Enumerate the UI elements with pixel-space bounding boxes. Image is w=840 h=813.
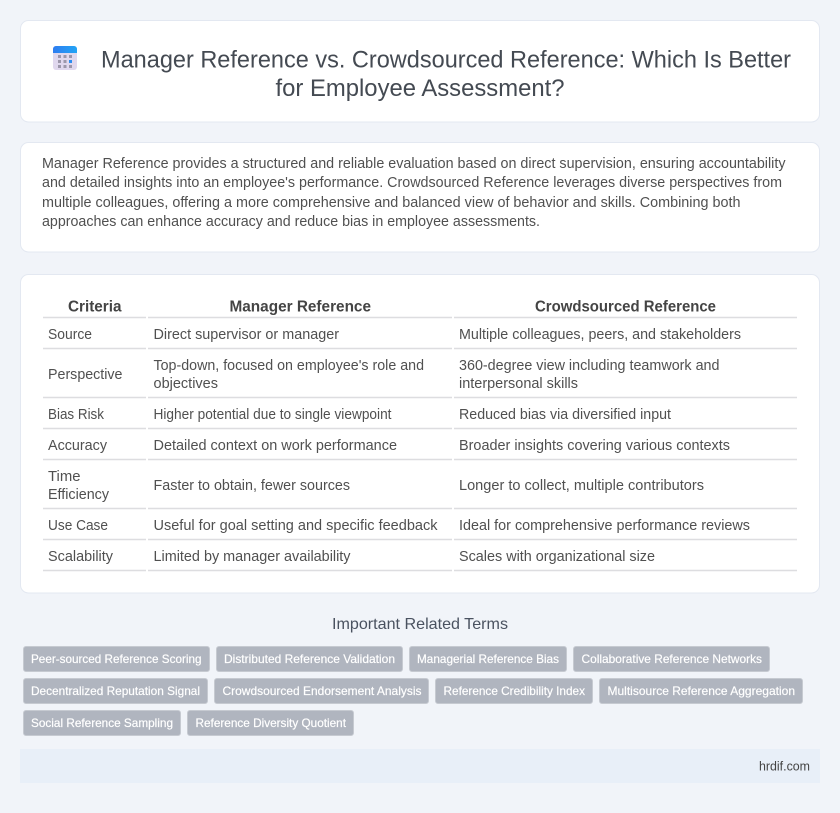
row: Scalability [48,549,655,565]
row: Accuracy: Detailed context on work performance [154,438,397,454]
table header row: Crowdsourced Reference [535,298,716,316]
row: Accuracy: Broader insights covering various contexts [459,438,730,454]
tag [436,678,592,704]
row: Accuracy [48,438,730,454]
tag: Decentralized Reputation Signal [31,684,200,698]
row: Time Efficiency: Longer to collect, multiple contributors [459,478,704,494]
row: Source: Source [48,327,92,343]
text block: introduction: approaches can enhance accuracy and reduce bias in employee assessments. [42,214,540,230]
tag [24,710,180,736]
text block: introduction [42,156,786,230]
row: Source: Multiple colleagues, peers, and stakeholders [459,327,741,343]
row: Perspective: interpersonal skills [459,376,578,392]
tag [24,678,208,704]
footer [20,749,820,783]
row: Perspective: objectives [154,376,218,392]
row: Use Case [48,518,750,534]
heading: title: for Employee Assessment? [276,75,564,102]
row: Scalability: Scalability [48,549,114,565]
tag [574,646,770,672]
heading: Important Related Terms: Important Related Terms [332,616,508,633]
tag [214,678,428,704]
row: Perspective: Perspective [48,367,122,383]
panel: introduction [20,142,820,252]
row: Perspective [48,358,720,392]
text block: introduction: Manager Reference provides a structured and reliable evaluation based on direct supervision, ensuring accountability [42,156,786,172]
row: Time Efficiency: Time [48,469,80,485]
tag: Peer-sourced Reference Scoring [31,652,202,666]
row: Bias Risk: Reduced bias via diversified input [459,407,671,423]
footer text: site name: hrdif.com [759,758,810,774]
tag: Distributed Reference Validation [224,652,395,666]
icon: calendar [53,46,77,70]
row: Accuracy: Accuracy [48,438,108,454]
table header row: Criteria [68,298,122,316]
table header row: Manager Reference [230,298,371,316]
row: Bias Risk [48,407,671,423]
tag: Collaborative Reference Networks [582,652,762,666]
row: Use Case: Ideal for comprehensive performance reviews [459,518,750,534]
row: Time Efficiency [48,469,704,503]
tag [600,678,802,704]
row: Time Efficiency: Faster to obtain, fewer sources [154,478,350,494]
row: Use Case: Use Case [48,518,108,534]
tag: Reference Diversity Quotient [196,716,347,730]
row: Source: Direct supervisor or manager [154,327,339,343]
row: Source [48,327,741,343]
tag: Managerial Reference Bias [417,652,559,666]
row: Scalability: Scales with organizational size [459,549,655,565]
panel: title header [20,20,820,122]
row: Use Case: Useful for goal setting and specific feedback [154,518,438,534]
panel: comparison table [20,274,820,593]
heading: title: Manager Reference vs. Crowdsourced Reference: Which Is Better [101,46,791,74]
row: Time Efficiency: Efficiency [48,487,110,503]
row: Bias Risk: Bias Risk [48,407,105,423]
text block: introduction: multiple colleagues, offering a more comprehensive and balanced view of behavior and skills. Combining both [42,195,740,211]
tag [410,646,566,672]
row: Perspective: 360-degree view including teamwork and [459,358,720,374]
text block: introduction: and detailed insights into an employee's performance. Crowdsourced Reference leverages diverse perspectives from [42,175,782,191]
table header row [68,298,716,316]
tag: Multisource Reference Aggregation [608,684,795,698]
tag: Crowdsourced Endorsement Analysis [222,684,422,698]
row: Perspective: Top-down, focused on employee's role and [154,358,424,374]
tag [216,646,402,672]
tag: Social Reference Sampling [31,716,173,730]
tag: Reference Credibility Index [444,684,585,698]
tag list: related terms [24,646,802,736]
heading: title [101,46,791,102]
tag [24,646,210,672]
row: Bias Risk: Higher potential due to single viewpoint [154,407,392,423]
row: Scalability: Limited by manager availability [154,549,351,565]
tag [188,710,354,736]
